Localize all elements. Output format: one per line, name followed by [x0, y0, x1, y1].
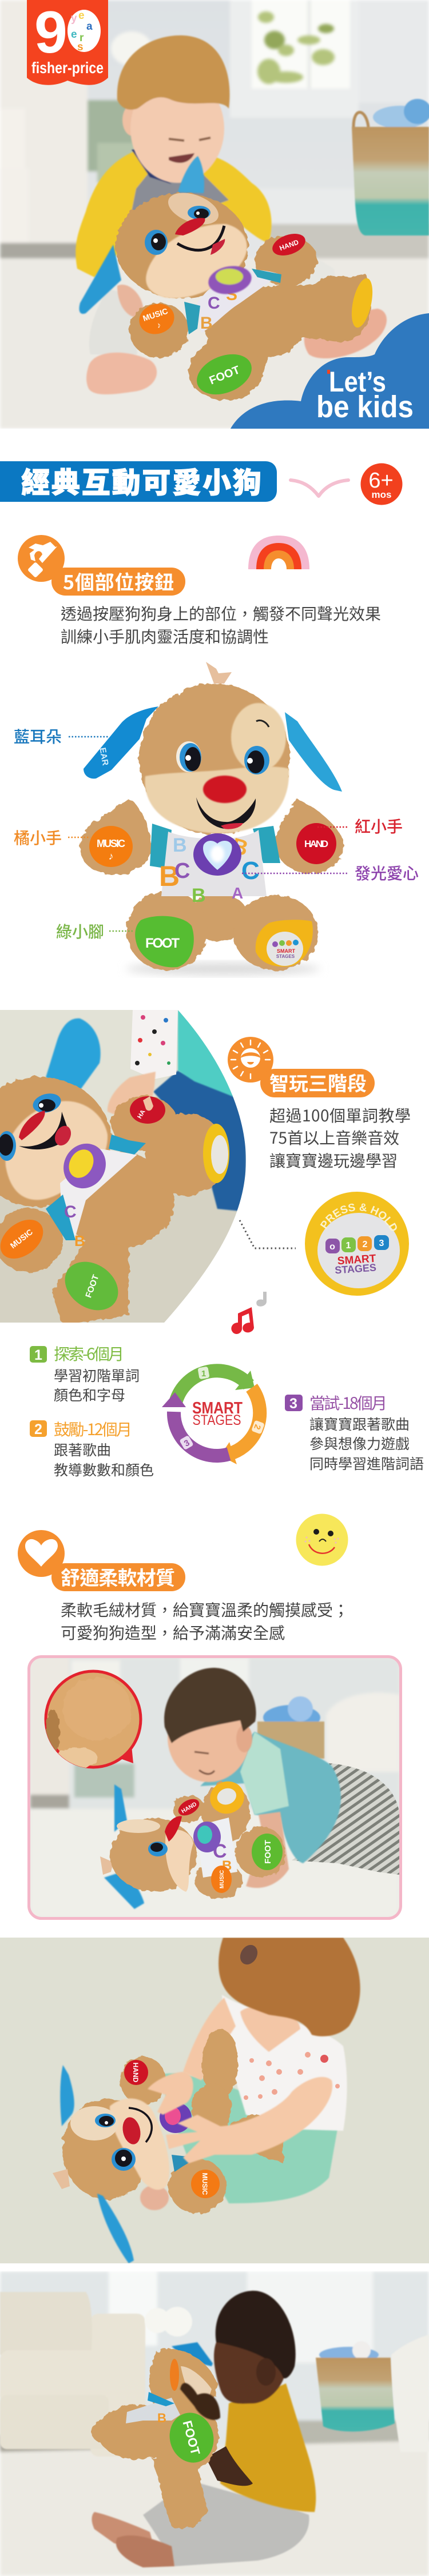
- alphabet shirt: [196, 1818, 237, 1878]
- puppy forehead: [70, 2106, 118, 2140]
- girl shirt: [222, 1995, 347, 2131]
- girl foot: [140, 2185, 169, 2210]
- red hand button: [124, 2060, 148, 2085]
- icon: heart: [18, 1530, 65, 1577]
- callout: green foot: 綠小腳: [56, 920, 104, 942]
- left blue ear: EAR: [97, 747, 110, 766]
- pill heading: 智玩三階段: [269, 1068, 367, 1096]
- green foot button: [197, 354, 252, 394]
- icon: grey music note: [256, 1292, 267, 1307]
- green foot button: [55, 1252, 128, 1320]
- orange music button: MUSIC: [97, 838, 125, 849]
- arc numbers: 3: [182, 1438, 192, 1449]
- anniversary zero with years: e: [78, 10, 85, 22]
- callout: green foot: [56, 920, 134, 942]
- puppy muzzle: [181, 2366, 212, 2406]
- puppy ear lower: [79, 245, 121, 314]
- section description: 柔軟毛絨材質，給寶寶溫柔的觸摸感受；: [61, 1598, 349, 1621]
- white armchair: [391, 2335, 429, 2452]
- green foot button: FOOT: [208, 364, 242, 387]
- section description: 訓練小手肌肉靈活度和協調性: [61, 625, 269, 648]
- orange music button: [0, 1212, 50, 1267]
- orange music button: [211, 1866, 232, 1893]
- boy teal shirt: [200, 1732, 341, 1863]
- rainbow: [248, 536, 309, 569]
- cloud: Let's be kids: Let’s: [329, 366, 386, 398]
- boy striped pants: [292, 1763, 399, 1875]
- red hand button: HAND: [180, 1801, 198, 1815]
- puppy ear upper: [178, 156, 204, 193]
- puppy tuft: [100, 1856, 113, 1875]
- orange music button: [191, 2170, 220, 2198]
- left blue ear: [84, 706, 158, 778]
- puppy shirt: [126, 2392, 180, 2425]
- stage number badges: 2: [363, 1240, 368, 1249]
- shirt letters: [201, 293, 237, 329]
- girl pants: [161, 2074, 337, 2203]
- callout: orange hand: [14, 826, 90, 849]
- alphabet shirt: B: [159, 860, 180, 892]
- section heading: soft material: [18, 1530, 185, 1591]
- alphabet shirt: B: [222, 1858, 232, 1874]
- orange music button: MUSIC: [219, 1870, 225, 1888]
- red hand button: [176, 1796, 202, 1819]
- puppy shirt: [197, 270, 280, 333]
- stage 2 text: [30, 1417, 154, 1480]
- puppy forehead patch: [168, 193, 219, 224]
- arc numbers: 2: [252, 1423, 263, 1431]
- alphabet shirt: C: [174, 859, 190, 883]
- heart button: [160, 2102, 192, 2133]
- stage 3 text: [285, 1391, 424, 1473]
- smart stages foot patch: SMART: [337, 1253, 376, 1267]
- stage 1 text: [30, 1342, 140, 1405]
- orange music button: MUSIC: [201, 2173, 209, 2195]
- orange arc: [220, 1388, 260, 1464]
- anniversary zero with years: [67, 10, 101, 53]
- shirt and sleeves: [46, 1135, 146, 1249]
- room: [0, 2271, 429, 2576]
- stage 2 text: 跟著歌曲: [54, 1439, 111, 1460]
- girl neck and face: [240, 2006, 300, 2052]
- red nose: [203, 776, 247, 803]
- shirt letters: B: [200, 314, 213, 333]
- puppy ear: [172, 2342, 213, 2366]
- section description: [61, 602, 381, 648]
- stage 3 text: 讓寶寶跟著歌曲: [309, 1413, 410, 1434]
- puppy muzzle: [110, 2098, 169, 2190]
- puppy fur: [0, 1077, 227, 1326]
- puppy shirt: B: [157, 2411, 166, 2425]
- brand badge: [27, 0, 108, 85]
- puppy smile: [19, 1112, 70, 1149]
- age badge: 6+ mos: [360, 463, 403, 505]
- stage 1 text: 學習初階單詞: [54, 1365, 140, 1385]
- tag tuft: [206, 662, 232, 684]
- icon: sun child face: [228, 1037, 273, 1083]
- legs, arms and head fur: [80, 684, 343, 971]
- green foot button: FOOT: [84, 1273, 101, 1299]
- alphabet shirt: [159, 830, 267, 906]
- toddler feet: [92, 2512, 174, 2567]
- alphabet shirt: B: [192, 885, 206, 906]
- light-up heart button: [193, 833, 241, 876]
- stage number badges: o: [329, 1242, 335, 1252]
- red hand button: [296, 823, 336, 864]
- shirt and sleeves: B: [74, 1232, 85, 1249]
- shirt letters: C: [208, 294, 220, 313]
- stage 1 text: 顏色和字母: [54, 1384, 125, 1405]
- floor shadow: [126, 963, 320, 975]
- anniversary zero with years: e: [71, 29, 77, 41]
- icon: smiling face: [296, 1513, 348, 1566]
- heart button lit yellow: [55, 1136, 114, 1196]
- puppy fur body: [62, 2029, 286, 2214]
- child jeans: [153, 1071, 246, 1212]
- stage number badges: 3: [379, 1239, 384, 1248]
- stage number badges: [325, 1235, 389, 1253]
- toddler hand: [180, 2383, 220, 2420]
- smart stages foot patch: STAGES: [335, 1262, 377, 1276]
- puppy ear down: [97, 2194, 134, 2263]
- boy yellow shirt: [76, 149, 272, 277]
- puppy fur body: [116, 193, 371, 400]
- green foot button: FOOT: [263, 1840, 273, 1864]
- yellow smart stages foot: STAGES: [276, 954, 295, 959]
- boy head: [164, 1668, 256, 1782]
- floor: [0, 1010, 252, 1323]
- yellow smart stages foot: SMART: [277, 948, 295, 954]
- toy basket: [257, 1696, 324, 1759]
- sofa: [0, 2292, 145, 2457]
- puppy toy: [79, 156, 376, 402]
- puppy eye: [148, 1842, 168, 1856]
- red hand button: [272, 234, 305, 255]
- toddler shirt: [220, 2383, 316, 2512]
- photo: girl playing with puppy on rug: [0, 1938, 429, 2263]
- flowers behind the boy: [111, 31, 152, 66]
- photo: boy hugging puppy hero: [0, 0, 429, 429]
- stage 2 text: 鼓勵-12個月: [54, 1417, 132, 1440]
- puppy nose: [165, 1816, 182, 1842]
- anniversary zero with years: s: [77, 41, 84, 53]
- puppy shirt bit: [172, 2155, 197, 2172]
- age badge: 6+ mos: 6+: [368, 469, 394, 493]
- age badge: 6+ mos: mos: [372, 489, 391, 500]
- rug: [0, 1938, 429, 2263]
- orange music button: [89, 826, 133, 867]
- alphabet shirt: B: [173, 834, 187, 856]
- stage 2 text: 教導數數和顏色: [54, 1459, 154, 1480]
- pressing finger: [143, 1096, 153, 1111]
- icon: red music note: [231, 1307, 254, 1334]
- puppy ear up: [60, 2065, 74, 2126]
- boy head and hair: [117, 35, 230, 183]
- puppy nose: [19, 1111, 45, 1140]
- callout: glowing heart: 發光愛心: [355, 861, 419, 884]
- title banner: 經典互動可愛小狗: [21, 460, 261, 501]
- girl hair: [219, 1938, 360, 2036]
- red hand button: HAND: [279, 238, 300, 252]
- room: [30, 1658, 399, 1918]
- speech bubble fur closeup: [46, 1671, 141, 1768]
- toddler arm: [206, 2446, 253, 2486]
- boy pants and feet: [86, 290, 388, 396]
- icon: pointing hand: [18, 535, 65, 582]
- alphabet shirt: C: [241, 857, 260, 885]
- pink frame: [29, 1656, 400, 1918]
- puppy forehead: [117, 1819, 160, 1833]
- section description: 透過按壓狗狗身上的部位，觸發不同聲光效果: [61, 602, 381, 625]
- photo: toddler hugging puppy on the floor: [0, 2271, 429, 2576]
- yellow sole button: [205, 1776, 249, 1819]
- smile: [196, 797, 256, 829]
- shirt and sleeves: C: [64, 1203, 77, 1221]
- green arc: [175, 1371, 255, 1405]
- puppy eyes: [145, 206, 210, 255]
- brand badge: 9: [34, 0, 67, 66]
- right blue ear: [285, 712, 342, 792]
- orange music button: MUSIC: [9, 1227, 34, 1250]
- pill heading: 5個部位按鈕: [63, 567, 174, 595]
- boy left hand: [117, 285, 144, 317]
- blue sleeves: [150, 824, 280, 869]
- anniversary zero with years: a: [86, 21, 93, 33]
- section heading: smart stages: [228, 1037, 375, 1097]
- section description: [61, 1598, 349, 1644]
- anniversary zero with years: r: [80, 32, 84, 44]
- green foot button: [135, 916, 194, 967]
- section heading: 5 buttons: [18, 535, 185, 596]
- stage 3 text: 參與想像力遊戲: [309, 1433, 410, 1453]
- stage badge 1: [30, 1346, 47, 1363]
- puppy eyes: [95, 2114, 136, 2171]
- stage 3 text: 同時學習進階詞語: [309, 1453, 424, 1473]
- girl left hand: [148, 2072, 193, 2115]
- section description: 超過100個單詞教學: [269, 1104, 411, 1127]
- boy arm: [246, 1812, 289, 1888]
- puppy ear: [46, 1019, 101, 1092]
- puppy muzzle: [6, 1101, 108, 1200]
- green foot button: [252, 1834, 283, 1870]
- girl right arm and hand: [166, 2077, 332, 2163]
- section description: 75首以上音樂音效: [269, 1126, 399, 1149]
- fur tufts: [46, 1678, 132, 1768]
- yellow sole patch: [351, 278, 373, 328]
- shirt letters: S: [226, 285, 237, 304]
- toddler head: [214, 2291, 296, 2403]
- section description: 可愛狗狗造型，給予滿滿安全感: [61, 1621, 285, 1644]
- decorative pink check mark: [291, 480, 348, 496]
- puppy product with callouts: [14, 662, 419, 975]
- ivy leaves in the window: [257, 11, 335, 84]
- orange music button: MUSIC: [142, 306, 169, 323]
- stage badge 1: 1: [34, 1347, 42, 1363]
- boy collar and sleeve: [240, 1732, 289, 1815]
- puppy nose: [175, 218, 205, 235]
- puppy muzzle: [165, 1830, 193, 1892]
- smart stages cycle diagram: SMART: [192, 1399, 243, 1417]
- stage badge 2: [30, 1420, 47, 1437]
- anniversary zero with years: y: [71, 13, 77, 25]
- stage badge 2: 2: [34, 1421, 42, 1437]
- section description: 讓寶寶邊玩邊學習: [269, 1149, 398, 1172]
- stage number badges: 1: [346, 1241, 351, 1251]
- alphabet shirt: A: [232, 884, 243, 902]
- stage badge 3: 3: [289, 1396, 297, 1412]
- puppy ears: [104, 1784, 144, 1909]
- orange music button: ♪: [156, 320, 162, 330]
- red hand button: HAND: [132, 2063, 140, 2083]
- stage 1 text: 探索-6個月: [54, 1342, 124, 1365]
- photo contents: [30, 1658, 399, 1918]
- toddler pants: [143, 2483, 309, 2566]
- puppy orange paw: [170, 2359, 179, 2391]
- puppy fur: [92, 2349, 219, 2529]
- heart button: [193, 1822, 221, 1852]
- puppy smile: [129, 2108, 152, 2142]
- child hand: [108, 1072, 156, 1115]
- woven basket with toys: [352, 99, 429, 235]
- heart sleeve: [130, 1010, 178, 1079]
- child teal top: [178, 1010, 240, 1097]
- puppy muzzle: [146, 224, 247, 298]
- yellow smart stages foot: [256, 920, 313, 967]
- arc numbers: [179, 1367, 265, 1450]
- puppy smile: [177, 226, 224, 250]
- brand badge: fisher-price: [31, 59, 104, 77]
- yellow sole: [203, 1124, 229, 1183]
- face patches and muzzle: [145, 703, 289, 833]
- stage badge 3: [285, 1395, 303, 1412]
- red hand button: [130, 1096, 165, 1124]
- light-up heart button: [207, 265, 253, 295]
- toy basket: [316, 2341, 395, 2431]
- green foot button: FOOT: [180, 2419, 203, 2457]
- callout: blue ear: 藍耳朵: [14, 725, 62, 748]
- puppy nose: [120, 2115, 143, 2146]
- red hand button: HA: [136, 1109, 147, 1120]
- shirt dots: [244, 2052, 340, 2100]
- smart stages foot patch: [305, 1192, 409, 1296]
- hair tie: [237, 1942, 261, 1968]
- green foot button: FOOT: [145, 936, 180, 951]
- girl upper left arm: [183, 1998, 236, 2080]
- smart stages cycle diagram: [162, 1367, 265, 1464]
- arc numbers: 1: [201, 1369, 206, 1379]
- red hand button: HAND: [304, 838, 328, 849]
- alphabet shirt: B: [229, 834, 251, 861]
- cloud: Let's be kids: be kids: [316, 390, 414, 424]
- callout: red hand: 紅小手: [355, 814, 403, 837]
- room background: [0, 0, 429, 429]
- puppy sleeves: [184, 269, 281, 334]
- photo panel: boy crawling with puppy: [29, 1656, 400, 1918]
- photo: child pressing puppy paw: [0, 1010, 252, 1326]
- callout: orange hand: 橘小手: [14, 826, 62, 849]
- boy: [76, 35, 387, 394]
- puppy eyes: [0, 1091, 63, 1161]
- white flowers: [145, 2307, 192, 2337]
- purple arc: [162, 1392, 229, 1456]
- puppy fur: [110, 1782, 285, 1899]
- green foot button: [164, 2408, 219, 2467]
- section description: [269, 1104, 411, 1172]
- orange music button: ♪: [109, 850, 113, 862]
- smart stages foot patch: PRESS & HOLD: [320, 1204, 397, 1231]
- pill heading: 舒適柔軟材質: [61, 1563, 175, 1591]
- smart stages cycle diagram: STAGES: [192, 1412, 241, 1428]
- alphabet shirt: C: [213, 1840, 227, 1862]
- eyes: [176, 741, 269, 774]
- orange music button: [139, 304, 174, 334]
- stage 3 text: 當試-18個月: [309, 1391, 387, 1414]
- puppy tuft: [53, 2169, 70, 2189]
- dotted leader: [240, 1220, 296, 1248]
- cloud: Let's be kids: [231, 313, 429, 429]
